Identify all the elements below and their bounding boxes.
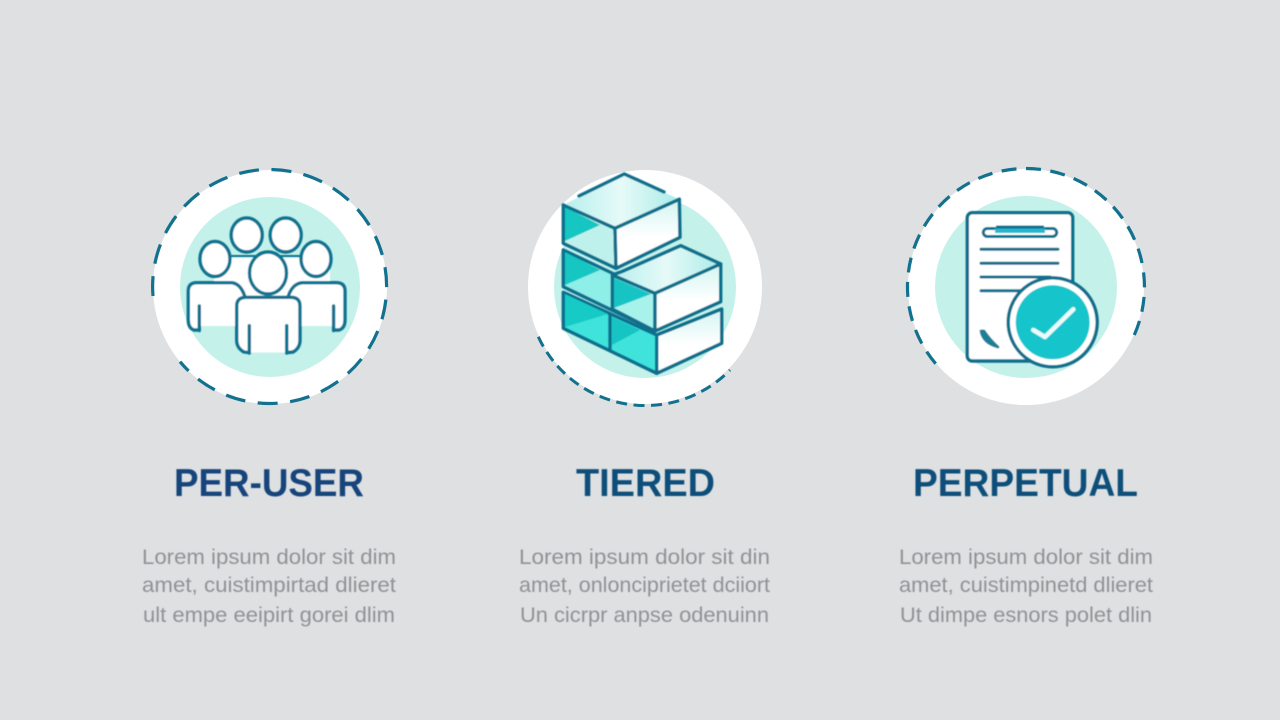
icon: licence document with check bbox=[967, 213, 1097, 367]
perpetual mint disc bbox=[935, 196, 1117, 378]
tiered dashed ring bbox=[538, 337, 730, 406]
heading: perpetual: PERPETUAL bbox=[913, 462, 1138, 505]
per-user white disc bbox=[153, 170, 387, 404]
panel: perpetual bbox=[899, 168, 1153, 627]
text block: tiered: amet, onlonciprietet dciiort bbox=[519, 574, 770, 597]
left middle column bbox=[563, 250, 655, 331]
text block: tiered: Un cicrpr anpse odenuinn bbox=[520, 604, 769, 627]
top box bbox=[563, 205, 616, 268]
panel: tiered bbox=[519, 170, 770, 627]
text block: per-user: ult empe eeipirt gorei dlim bbox=[143, 604, 395, 627]
icon: stacked blocks bbox=[563, 174, 722, 373]
tiered mint disc bbox=[554, 196, 736, 378]
icon: group of people bbox=[188, 218, 345, 353]
heading: tiered: TIERED bbox=[576, 462, 715, 505]
panel: per-user bbox=[142, 169, 396, 627]
text block: per-user: Lorem ipsum dolor sit dim bbox=[142, 546, 396, 569]
text block: tiered bbox=[519, 546, 770, 627]
text block: tiered: Lorem ipsum dolor sit din bbox=[519, 546, 770, 569]
per-user dashed ring bbox=[153, 169, 387, 403]
text block: perpetual: amet, cuistimpinetd dlieret bbox=[899, 574, 1153, 597]
text block: perpetual: Lorem ipsum dolor sit dim bbox=[899, 546, 1153, 569]
text block: per-user: amet, cuistimpirtad dlieret bbox=[142, 574, 396, 597]
per-user mint disc bbox=[180, 197, 360, 377]
tiered white disc bbox=[528, 170, 762, 404]
perpetual white disc bbox=[908, 169, 1144, 405]
text block: perpetual bbox=[899, 546, 1153, 627]
heading: per-user: PER-USER bbox=[174, 462, 364, 505]
text block: perpetual: Ut dimpe esnors polet dlin bbox=[900, 604, 1152, 627]
middle box bbox=[612, 275, 655, 331]
text block: per-user bbox=[142, 546, 396, 627]
perpetual dashed ring bbox=[907, 168, 1144, 367]
bottom row bbox=[563, 292, 722, 373]
